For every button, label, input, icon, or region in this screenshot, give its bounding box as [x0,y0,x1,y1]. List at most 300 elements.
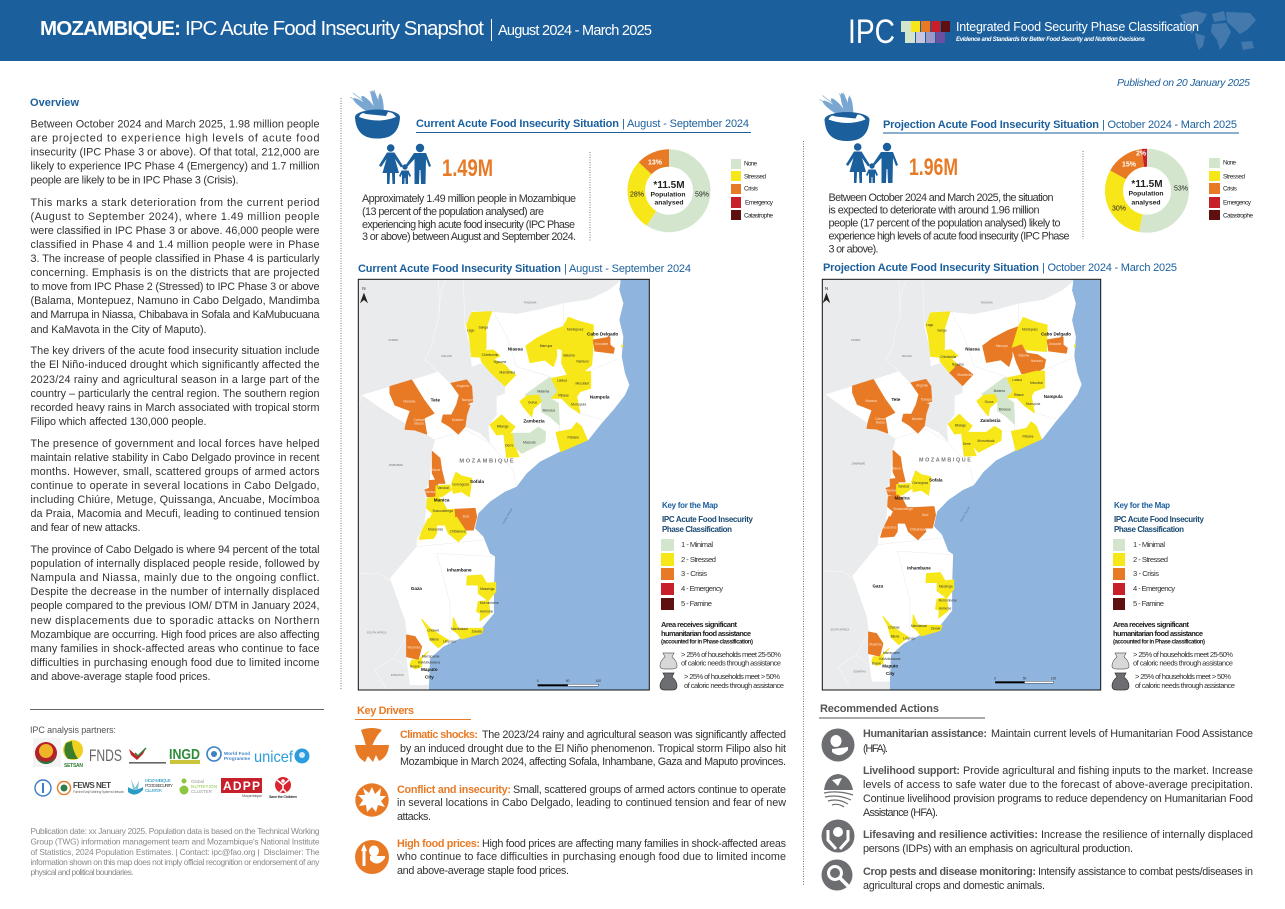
map: current situation: Zavala [472,629,482,633]
map: current situation: Lago [467,329,474,333]
overview paragraph 5: Despite the decrease in the number of internally displaced [30,586,320,598]
description: experiencing high acute food insecurity (IPC Phase [362,219,575,231]
donut legend [1209,158,1253,220]
heading: | October 2024 - March 2025 [1102,119,1237,131]
map: projection: ESWATINI [854,670,866,674]
panel: IPC analysis partners [30,725,310,799]
map legend: current: of caloric needs through assistance [684,681,784,690]
logo: ADPP: ADPP [223,779,260,793]
donut chart: *11.5M [1131,179,1163,190]
map: projection: Tsangano [921,397,935,401]
donut chart: 2% [1136,150,1147,158]
overview paragraph 2: This marks a stark deterioration from the current period [30,197,320,209]
IPC logo: Evidence and Standards for Better Food Security and Nutrition Decisions [956,37,1146,43]
map: current situation: Mandimba [500,371,515,375]
map: current situation: Cahora [414,418,425,422]
description: 3 or above). [828,244,878,256]
map: current situation: Zambezia [523,419,545,424]
overview paragraph 5: people compared to the previous IOM/ DTM in January 2024, [30,600,320,612]
overview paragraph 2: and KaMavota in the City of Maputo). [30,324,206,336]
map: projection: Malema [994,389,1005,393]
overview paragraph 2: were classified in IPC Phase 3 or above. 46,000 people were [30,225,320,237]
map: projection: Namuno [1031,359,1043,363]
map: projection: Moatize [912,417,923,421]
logo: World Food Programme: Programme [224,756,250,761]
heading: | August - September 2024 [622,118,749,130]
map: projection: TANZANIA [980,301,993,305]
map: current situation: Angonia [457,384,469,388]
humanitarian assistance text: Maintain current levels of Humanitarian Food Assistance [991,728,1253,740]
key drivers heading: Key Drivers [357,705,414,717]
map title: current [358,263,691,275]
overview paragraph 4 [30,438,320,534]
map: projection: Homoine [939,607,952,611]
donut chart: 59% [695,192,709,198]
overview paragraph 5: population of internally displaced people reside, followed by [30,558,320,570]
map: projection: Gurue [985,400,994,404]
map legend: projection: 2 - Stressed [1133,555,1168,564]
donut chart: analysed [654,200,684,206]
logo: FEWS NET [58,781,124,794]
map legend: current: humanitarian food assistance [661,629,751,638]
map legend: projection [1112,501,1235,690]
overview paragraph 4: continue to operate in several locations in Cabo Delgado, [30,480,320,492]
map: projection: MOZAMBIQUE [919,457,972,463]
lifesaving text: persons (IDPs) with an emphasis on agricultural production. [863,843,1133,855]
map: current situation: MOZAMBIQUE [459,459,515,465]
map: projection: Derre [963,442,971,446]
map: current situation: Manica [434,497,450,502]
description: people (17 percent of the population analysed) likely to [828,218,1060,230]
overview paragraph 2: (August to September 2024), where 1.49 million people [30,211,320,223]
logo: INE [129,748,166,764]
map: projection: ZAMBIA [851,338,861,342]
livelihood support text: levels of access to safe water due to the forecast of above-average precipitation. [863,779,1253,791]
map: projection: 50 [1023,676,1026,680]
donut legend: None [744,160,757,168]
logo: INGD: INGD [169,746,200,763]
overview paragraph 5: many families in shock-affected areas who continue to face [30,643,320,655]
map title: current: Current Acute Food Insecurity Situation [358,263,561,275]
lifesaving text: Increase the resilience of internally displaced [1041,829,1253,841]
map: current situation: Nampula [590,395,610,400]
description: Between October 2024 and March 2025, the situation [828,192,1054,204]
map legend: projection: Key for the Map [1114,501,1170,510]
map: current situation: Lalaua [557,379,567,383]
map: projection: City [886,671,895,676]
publication date: Published on 20 January 2025 [1117,77,1250,89]
logo: global nutrition cluster: NUTRITION [191,784,217,789]
map: current situation: Barue [432,468,441,472]
map: projection: Zambezia [980,418,1001,423]
overview paragraph 1 [30,118,320,186]
IPC logo: Integrated Food Security Phase Classification [956,20,1199,34]
map: current situation: N [362,286,366,291]
donut chart [1112,150,1188,224]
lifesaving text: Lifesaving and resilience activities: [863,829,1038,841]
map: current situation: Gurue [528,401,537,405]
map: current situation: Chokwe [427,628,439,632]
map legend: projection: Phase Classification [1114,525,1184,534]
donut legend [731,159,774,220]
livelihood support text [863,765,1253,819]
donut legend: None [1223,160,1236,166]
map: current situation: Pebane [568,435,579,439]
logo: global nutrition cluster [180,778,217,794]
map: projection: Chibabava [910,528,925,532]
map legend: current [660,501,784,690]
map: current situation: Vanduzi [437,486,449,490]
donut chart: 15% [1122,162,1137,168]
map: current situation: 100 [596,679,601,683]
map: projection [822,280,1100,690]
map legend: projection: 5 - Famine [1133,599,1164,608]
map title: current: | August - September 2024 [564,263,691,275]
high food prices text: and above-average staple food prices. [397,865,569,877]
overview paragraph 2: and Marrupa in Niassa, Chibabava in Sofala and KaMubucuana [30,309,320,321]
map: projection: N [825,286,828,291]
map: projection: Ribaue [1014,393,1024,397]
icon: crop pests monitoring [822,860,852,890]
panel: overview [30,97,320,683]
map: projection: Indian Ocean [959,505,971,523]
footnote: Publication date: xx January 2025. Population data is based on the Technical Working [30,826,320,836]
conflict text: in several locations in Cabo Delgado, leading to continued tension and fear of new [397,797,786,809]
heading: Projection Acute Food Insecurity Situation [883,119,1099,131]
map: projection: Niassa [965,346,980,352]
map: projection: Sussundenga [893,507,913,511]
logo: World Food Programme [207,747,250,761]
map legend: current: (accounted for in Phase classification) [661,640,753,646]
donut chart: analysed [1131,200,1161,206]
map: current situation: Maravia [403,400,415,404]
livelihood support text: Provide agricultural and fishing inputs to the market. Increase [963,765,1253,777]
panel: key drivers [355,705,787,877]
footnote: Group (TWG) information management team and Mozambique's National Institute [30,836,320,846]
IPC logo: IPC [848,13,895,51]
map: current situation: Murrupula [571,403,586,407]
map: projection: Maputo [882,664,898,669]
donut chart: 30% [1112,206,1126,212]
map: current situation: Mossurize [428,527,443,531]
overview paragraph 3: recorded heavy rains in March associated with tropical storm [30,402,320,414]
map: projection: Lalaua [1012,378,1022,382]
map: current situation: TANZANIA [523,300,537,304]
humanitarian assistance text [863,728,1253,755]
map: current situation: Malema [537,389,549,393]
map: projection: Chimbonila [940,355,956,359]
map: current situation: Molocue [543,408,555,412]
map legend: current: > 25% of households meet 25-50% [681,650,781,659]
map: projection: Mecuburi [1030,381,1043,385]
logo: FNDS: FNDS [89,746,122,765]
map: current situation: Manica [425,490,435,494]
map: current situation: Milange [497,425,509,429]
map: current situation: Morrumbene [480,601,499,605]
map: current situation: SOUTH AFRICA [367,630,387,634]
overview paragraph 4: maintain relative stability in Cabo Delgado province in recent [30,452,320,464]
overview paragraph 2: to move from IPC Phase 2 (Stressed) to IPC Phase 3 or above [30,281,320,293]
donut chart: 13% [648,160,663,166]
map: projection: Gaza [872,583,884,588]
conflict text: Small, scattered groups of armed actors continue to operate [513,784,786,796]
overview paragraph 2 [30,197,320,336]
conflict text: Conflict and insecurity: [397,784,511,796]
overview paragraph 3: The key drivers of the acute food insecurity situation include [30,345,320,357]
map: projection: Boane [872,661,881,665]
map: projection: Mandimba [957,373,972,377]
map legend: projection: 1 - Minimal [1133,540,1165,549]
map: projection: Limpopo [903,636,916,640]
humanitarian assistance text: (HFA). [863,743,888,755]
donut chart: *11.5M [653,180,685,191]
logo: SETSAN [63,740,83,769]
overview paragraph 4: including Chiúre, Metuge, Quissanga, Ancuabe, Mocímboa [30,494,320,506]
icon: livelihood support [824,774,853,807]
overview paragraph 2: classified in Phase 4 and 1.4 million people were in Phase [30,239,320,251]
panel: projection summary [820,92,1253,256]
overview paragraph 3: the El Niño-induced drought which significantly affected the [30,359,320,371]
title: August 2024 - March 2025 [498,23,652,39]
donut chart [630,158,709,223]
title: MOZAMBIQUE: [40,17,181,40]
map: current situation: Indian Ocean [501,507,514,525]
map: current situation: Mecuburi [575,382,589,386]
donut legend: Crisis [1223,186,1237,192]
logo: UNICEF: unicef [254,749,293,766]
overview paragraph 2: concerning. Emphasis is on the districts that are projected [30,267,320,279]
map: projection: Inhambane [907,565,931,570]
map: current situation: Marrupa [540,344,552,348]
icon: wheat bowl [350,90,400,139]
IPC logo [848,13,1199,51]
map: current situation: Gorongosa [452,483,469,487]
map: current situation: KaMubukwana [418,660,440,664]
map: current situation: Ribaue [558,394,569,398]
logo: ADPP: Moçambique [242,794,262,798]
description [362,193,576,243]
map: current situation: 0 [537,679,539,683]
map: projection: Sanga [937,329,947,333]
high food prices text: High food prices are affecting many families in shock-affected areas [482,838,787,850]
climatic shocks text: Mozambique in March 2024, affecting Sofala, Inhambane, Gaza and Maputo provinces. [400,756,786,768]
map: projection: Chokwe [888,625,900,629]
map: projection: Morrumbala [977,439,995,443]
map: current situation: ZAMBIA [388,338,398,342]
map: current situation: Ngauma [494,360,506,364]
map: projection: Ngauma [952,363,964,367]
logo: food security cluster: FOOD SECURITY [145,783,173,788]
overview paragraph 3 [30,345,320,428]
overview paragraph 4: and fear of new attacks. [30,522,140,534]
overview paragraph 5: Nampula and Niassa, mainly due to the ongoing conflict. [30,572,320,584]
map legend: current: IPC Acute Food Insecurity [662,515,754,524]
map: projection: Murrupula [1026,402,1040,406]
climatic shocks text: by an induced drought due to the El Niño phenomenon. Tropical storm Filipo also hit [400,743,786,755]
map: current situation: Montepuez [567,327,584,331]
crop pests text [863,866,1253,892]
humanitarian assistance text: Humanitarian assistance: [863,728,987,740]
map: projection: Angonia [916,383,928,387]
map title: projection: | October 2024 - March 2025 [1042,262,1177,274]
logo: Mozambique emblem [33,738,61,767]
conflict text: attacks. [397,811,431,823]
map: projection: Nampula [1044,394,1063,399]
donut chart: Population [1128,190,1164,198]
map: current situation: Marracuene [422,654,440,658]
map: current situation: Boane [410,665,420,669]
map legend: projection: > 25% of households meet 25-50% [1133,650,1233,659]
footnote: of Statistics, 2024 Population Estimates. | Contact: ipc@fao.org | Disclaimer: The [30,847,320,857]
climatic shocks text [400,729,786,768]
map: projection: Tete [892,397,901,402]
map: projection: KaMubukwana [879,657,901,661]
map legend: current: 3 - Crisis [681,569,707,578]
logo: FEWS NET: Famine Early Warning Systems Network [73,790,124,794]
map: current situation: Maccula [523,440,536,444]
map: projection: Gorongosa [912,481,928,485]
lifesaving text [863,829,1253,855]
high food prices text: who continue to face difficulties in purchasing enough food due to limited income [396,851,786,863]
overview paragraph 5: new displacements due to sporadic attacks on Northern [30,615,320,627]
footnote: information shown on this map does not imply official recognition or endorsement of any [30,857,320,867]
title [40,17,652,41]
map: current situation: Limpopo [443,639,456,643]
crop pests text: Intensify assistance to combat pests/diseases in [1038,866,1253,878]
map: current situation [358,280,649,690]
map legend: current: of caloric needs through assistance [681,658,781,668]
crop pests text: agricultural crops and domestic animals. [863,880,1045,892]
logo: ADPP [221,778,262,798]
logo: Save the Children: Save the Children [269,795,298,799]
overview paragraph 1: are projected to experience high levels of acute food [30,132,320,144]
icon: dark bag [660,673,677,690]
description: Approximately 1.49 million people in Mozambique [362,193,576,205]
icon: wheat bowl [820,92,870,141]
recommended actions heading: Recommended Actions [820,703,939,715]
map: current situation: Chimbonila [482,353,498,357]
conflict text [397,784,786,823]
stat: 1.96M: 1.96M [909,154,958,181]
crop pests text: Crop pests and disease monitoring: [863,866,1036,878]
map: current situation: City [425,675,434,680]
donut legend: Stressed [1223,174,1245,180]
overview paragraph 5: The province of Cabo Delgado is where 94 percent of the total [30,544,320,556]
logo: global nutrition cluster: CLUSTER [191,789,213,794]
map: projection: Cabo Delgado [1041,332,1071,337]
map: current situation: Derre [505,443,514,447]
footnote [30,826,320,877]
donut chart: 53% [1174,186,1188,192]
climatic shocks text: The 2023/24 rainy and agricultural season was significantly affected [482,729,786,741]
icon: dark bag [1112,673,1129,690]
map: current situation: ESWATINI [391,673,404,677]
map: current situation: Sussundenga [432,509,453,513]
logo: SETSAN: SETSAN [64,763,83,769]
map: projection: Bilene [891,634,900,638]
icon: light bag [660,653,677,669]
description: experience high levels of acute food insecurity (IPC Phase [828,230,1070,242]
logo: food security cluster: MOZAMBIQUE [145,778,171,783]
donut legend: Stressed [744,174,766,180]
map: current situation: MALAWI [441,354,452,358]
high food prices text [396,838,787,877]
map: projection: 0 [994,676,996,680]
map: projection: Morrumbene [939,598,957,602]
map: projection: Bassa [876,420,885,424]
logo: FAO [35,780,51,796]
map: projection: Buzi [922,513,929,517]
map: current situation: Sanga [478,325,488,329]
donut legend: Emergency [745,200,774,206]
map: projection: MALAWI [902,354,912,358]
logo: food security cluster [128,778,173,795]
map: projection: Montepuez [1022,327,1038,331]
map: projection: Mandlakazi [911,624,927,628]
icon: family [846,143,898,183]
map: current situation: Ancuabe [595,342,608,346]
logo: food security cluster: CLUSTER [145,788,163,793]
map: projection: Molocue [999,408,1011,412]
map: projection: Balama [1018,353,1029,357]
map: current situation: Tsangano [461,398,476,402]
overview paragraph 2: 3. The increase of people classified in Phase 4 is particularly [30,253,320,265]
map legend: projection: IPC Acute Food Insecurity [1114,515,1205,524]
map legend: current: Key for the Map [662,501,718,510]
map: projection: Ancuabe [1049,342,1062,346]
panel: recommended actions [819,703,1253,892]
map: current situation: Namuno [576,359,589,363]
map: projection: Barue [892,467,901,471]
description: (13 percent of the population analysed) are [362,206,544,218]
icon: family [379,144,431,184]
header banner [0,0,1285,61]
map: projection: ZIMBABWE [852,462,865,466]
map legend: projection: 3 - Crisis [1133,569,1159,578]
map legend: projection: of caloric needs through assistance [1135,681,1235,690]
logo: global nutrition cluster: Global [191,779,204,784]
overview paragraph 5: Mozambique are occurring. High food prices are also affecting [30,629,320,641]
icon: conflict [355,783,389,817]
map: projection: Milange [955,424,966,428]
overview paragraph 3: country – particularly the central region. The southern region [30,388,320,400]
map legend: projection: of caloric needs through assistance [1133,658,1233,668]
map legend: projection: > 25% of households meet > 50% [1135,672,1231,681]
map: projection: Cahora [875,417,886,421]
donut legend: Catastrophe [1223,212,1253,220]
map: current situation: Bilene [430,637,439,641]
logo: World Food Programme: World Food [224,751,250,756]
footnote: physical and political boundaries. [30,867,134,877]
map: projection: Zavala [931,626,940,630]
overview paragraph 3: Filipo which affected 130,000 people. [30,416,206,428]
map title: projection: Projection Acute Food Insecurity Situation [823,262,1039,274]
map: projection: SOUTH AFRICA [830,627,849,631]
map legend: current: 4 - Emergency [681,584,723,593]
overview paragraph 4: da Praia, Macomia and Mecufi, leading to continued tension [30,508,320,520]
logo: FEWS NET: FEWS NET [73,781,111,790]
map: projection: Manica [886,488,896,492]
map: projection: Moamba [869,642,882,647]
map: projection: Vanduzi [898,484,910,488]
map: current situation: ZIMBABWE [389,463,403,467]
map: current situation: Tete [431,398,440,403]
description: 3 or above) between August and September 2024. [362,231,576,243]
donut legend: Crisis [744,186,758,192]
overview paragraph 1: likely to experience IPC Phase 4 (Emergency) and 1.7 million [30,160,320,172]
overview paragraph 1: people are likely to be in IPC Phase 3 (Crisis). [30,174,238,186]
map legend: projection: (accounted for in Phase classification) [1113,640,1205,646]
